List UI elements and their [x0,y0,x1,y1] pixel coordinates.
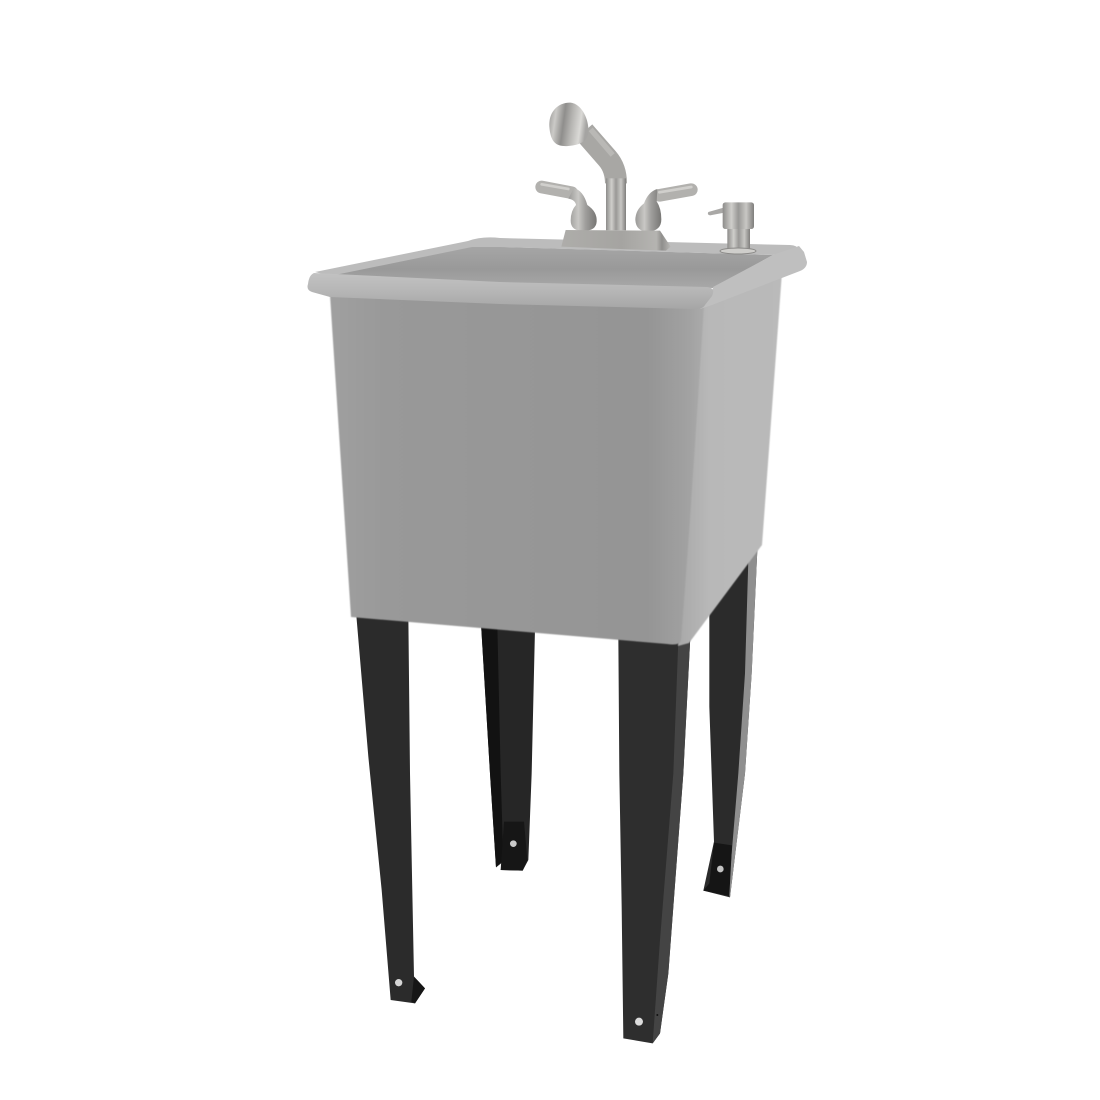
tub: right side face [678,272,782,646]
leg: front left [356,612,425,1003]
leg: back middle [481,623,535,871]
tub: front rim [308,273,713,309]
faucet: left handle [542,184,597,231]
soap dispenser [708,202,756,254]
faucet [542,103,691,251]
faucet: spray head [549,103,588,146]
leg: back right [703,550,757,897]
tub: back rim [315,237,799,276]
faucet: right handle [635,187,691,232]
faucet: neck [584,129,626,230]
tub: interior [325,246,773,288]
faucet: base plate [561,230,671,251]
leg: front [618,630,691,1043]
tub: right rim [700,246,807,309]
tub: front face [330,295,704,644]
